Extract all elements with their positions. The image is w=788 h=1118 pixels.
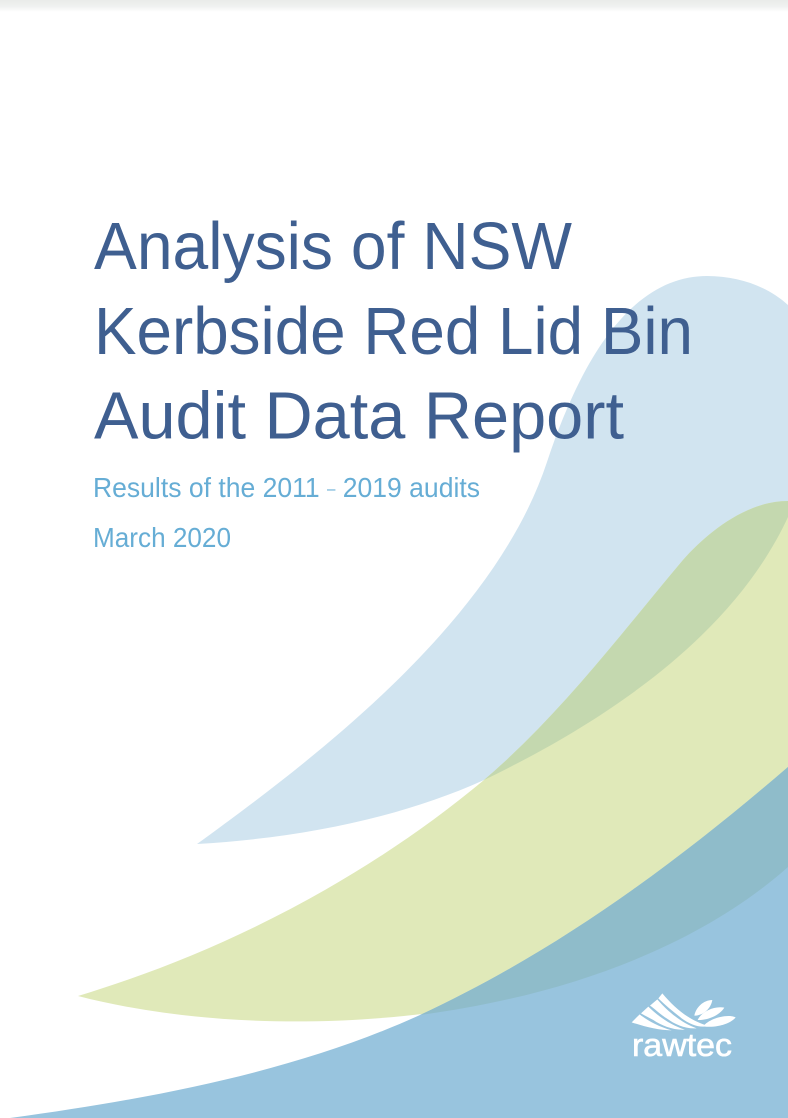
- logo: rawtec: rawtec: [632, 1027, 732, 1063]
- title: Analysis of NSW: [94, 209, 573, 284]
- wave: green and bottom blue overlap: [420, 767, 788, 1015]
- title: Kerbside Red Lid Bin: [94, 294, 693, 369]
- wave: light blue: [197, 276, 788, 844]
- title: [94, 209, 693, 454]
- wave: green: [78, 501, 788, 1021]
- subtitle: 2019 audits: [335, 472, 480, 503]
- title: Audit Data Report: [94, 378, 624, 454]
- logo: rawtec: [632, 993, 736, 1063]
- subtitle: –: [327, 481, 336, 498]
- date: March 2020: [93, 522, 231, 553]
- wave: bottom blue: [10, 767, 788, 1118]
- wave: blue and green overlap: [484, 501, 788, 780]
- subtitle: Results of the 2011: [93, 472, 332, 503]
